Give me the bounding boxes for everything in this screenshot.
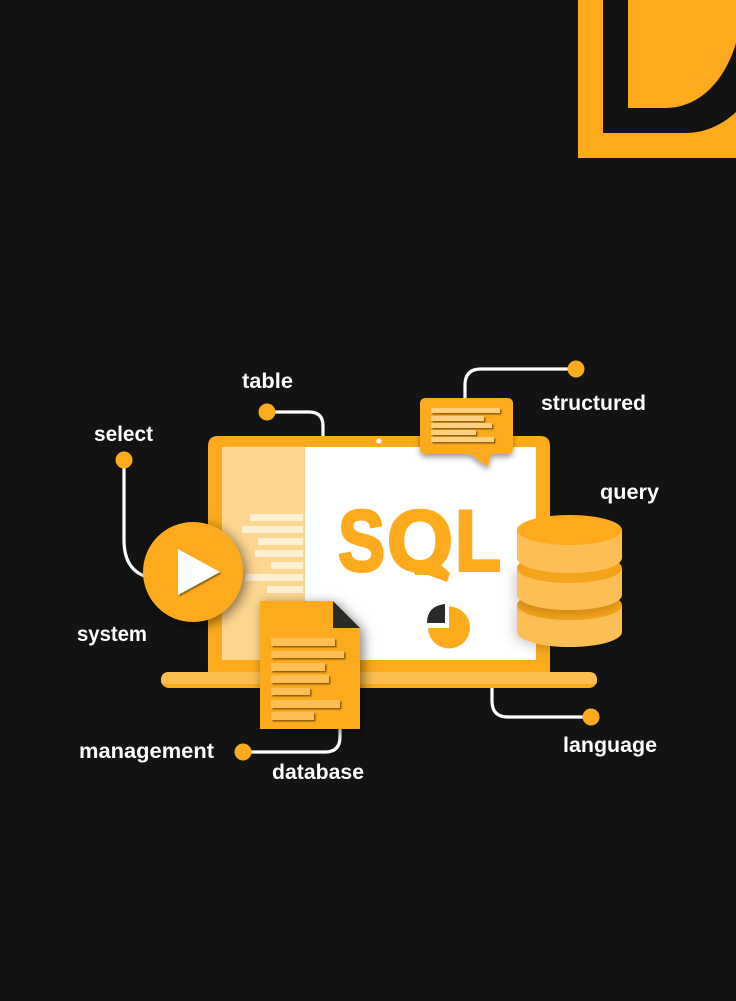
connector: select: [116, 452, 147, 577]
pie chart icon: [427, 604, 470, 648]
connector: language: [492, 687, 600, 726]
play button icon: [143, 522, 243, 622]
label: query: query: [600, 481, 659, 504]
connector: management: [234, 728, 340, 760]
label: structured: structured: [541, 392, 646, 415]
code lines: [242, 514, 303, 593]
SQL heading: L: [455, 494, 501, 590]
connector: table: [258, 404, 323, 437]
speech bubble icon: [420, 398, 513, 467]
document icon: [260, 601, 360, 729]
label: database: database: [272, 761, 364, 784]
label: system: system: [77, 623, 147, 646]
laptop: [161, 436, 597, 688]
laptop base: [161, 672, 597, 688]
label: select: select: [94, 423, 153, 446]
SQL heading: [338, 494, 501, 595]
SQL heading: S: [338, 494, 385, 590]
label: language: language: [563, 734, 657, 757]
screen side panel: [222, 447, 305, 660]
connector: structured: [465, 360, 584, 399]
SQL heading: Q: [387, 494, 453, 590]
laptop screen: [222, 447, 536, 660]
label: table: table: [242, 370, 293, 393]
database icon: [517, 515, 622, 647]
logo: corner D mark: [578, 0, 736, 158]
laptop body: [208, 436, 550, 672]
camera dot: [376, 438, 382, 444]
label: management: management: [79, 740, 214, 763]
